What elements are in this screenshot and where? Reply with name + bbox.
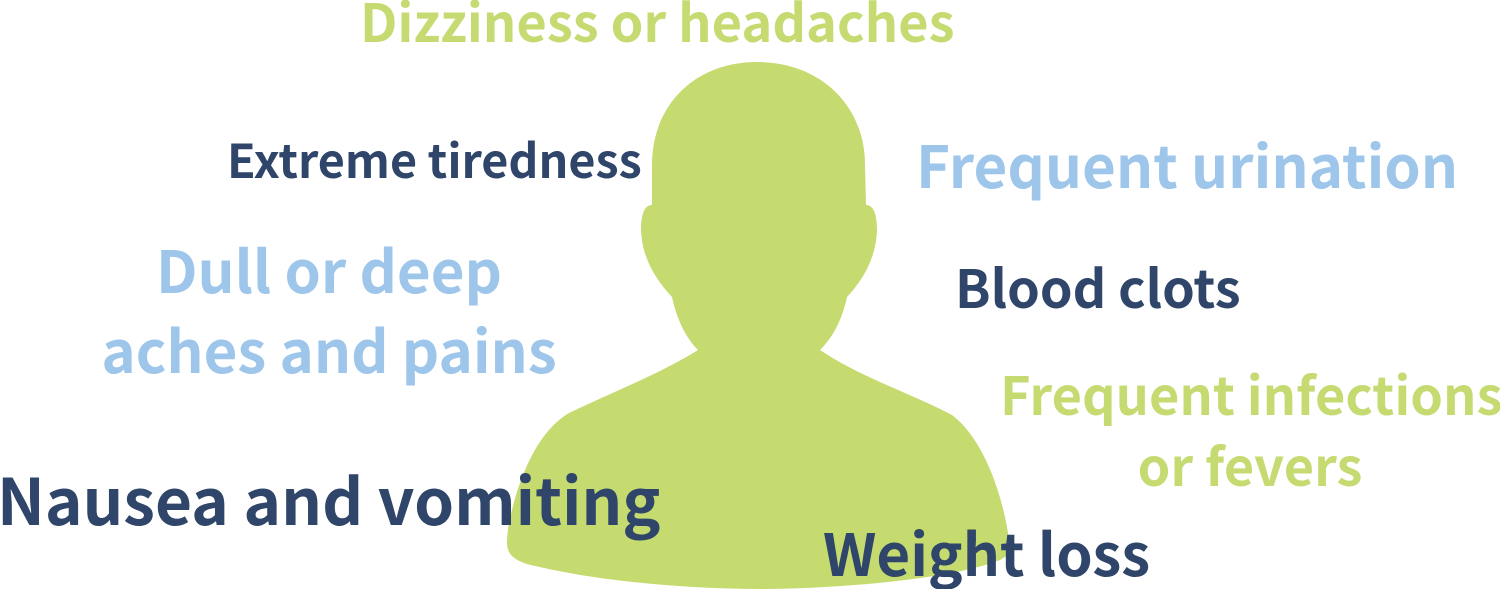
text: dull or deep aches and pains: Dull or deep — [156, 225, 502, 310]
text: nausea and vomiting: Nausea and vomiting — [0, 452, 661, 544]
text: dull or deep aches and pains: aches and pains — [101, 305, 557, 390]
text: frequent urination: Frequent urination — [916, 120, 1458, 205]
text: frequent infections or fevers: Frequent infections — [1000, 355, 1500, 431]
text: frequent infections or fevers: or fevers — [1138, 426, 1362, 502]
text: dull or deep aches and pains — [101, 225, 557, 390]
text: blood clots: Blood clots — [955, 248, 1241, 324]
text: extreme tiredness: Extreme tiredness — [227, 125, 642, 192]
text: frequent infections or fevers — [1000, 355, 1500, 502]
